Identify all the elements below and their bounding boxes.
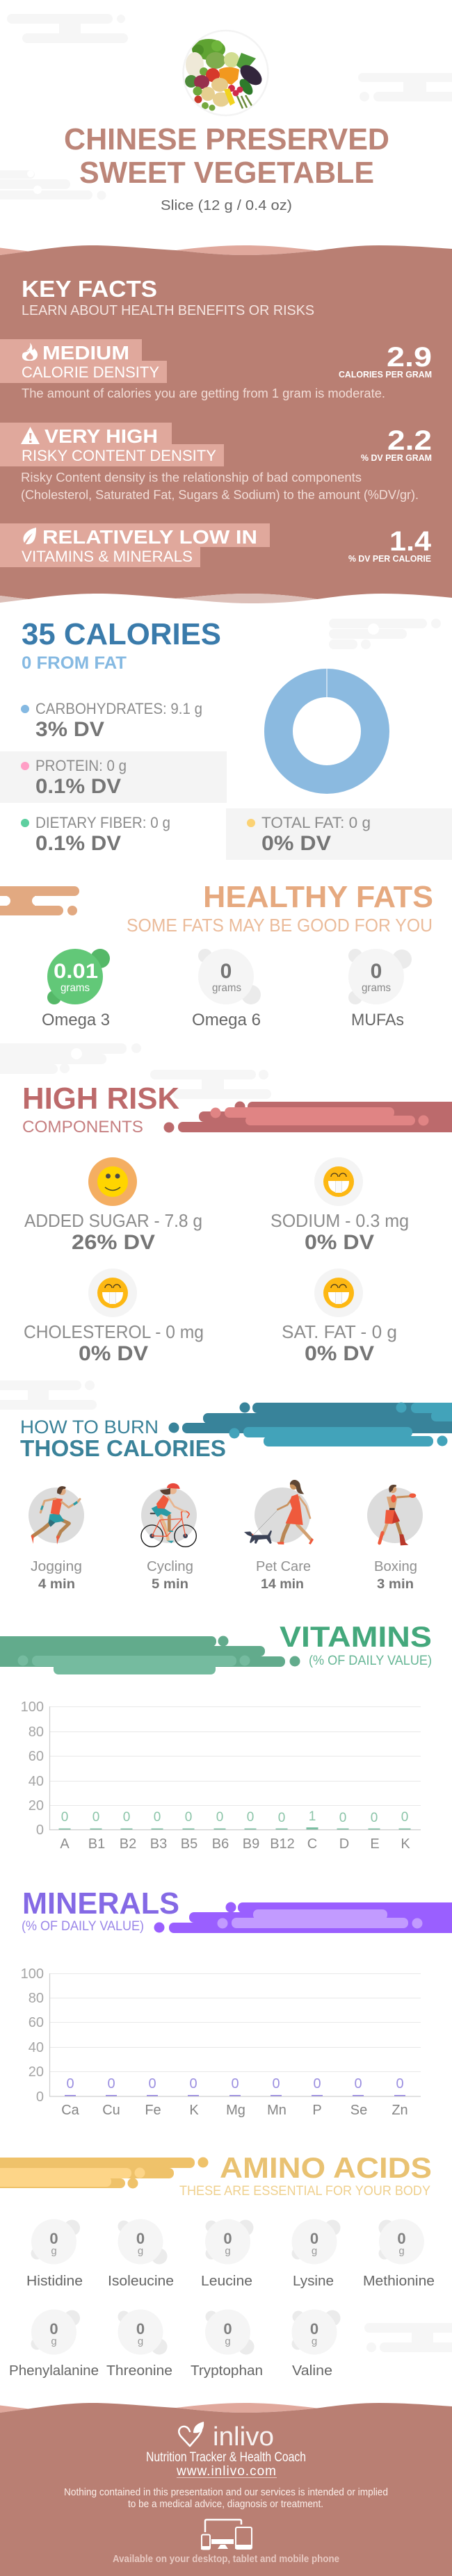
disclaimer: Nothing contained in this presentation and our services is intended or implied bbox=[64, 2486, 388, 2498]
amino: histidine bbox=[26, 2219, 83, 2289]
subheading: COMPONENTS bbox=[22, 1118, 143, 1136]
fat: omega 3: Omega 3 bbox=[42, 1011, 110, 1029]
bar chart: minerals: 0 bbox=[36, 2089, 44, 2105]
heading: key facts: KEY FACTS bbox=[22, 276, 157, 302]
amino: leucine: 0 bbox=[223, 2230, 232, 2247]
bar chart: vitamins: 0 bbox=[216, 1810, 223, 1825]
labels: activities: 14 min bbox=[261, 1577, 304, 1592]
amino: leucine bbox=[201, 2219, 253, 2289]
title: SWEET VEGETABLE bbox=[79, 156, 374, 190]
amino: valine: g bbox=[312, 2335, 317, 2347]
amino: methionine: 0 bbox=[397, 2230, 406, 2247]
amino: lysine bbox=[292, 2219, 341, 2289]
component: cholesterol: CHOLESTEROL - 0 mg bbox=[24, 1321, 204, 1342]
bar chart: minerals: 40 bbox=[29, 2040, 44, 2055]
metric: dv per calorie bbox=[348, 526, 432, 564]
labels: activities: Boxing bbox=[374, 1559, 417, 1574]
subheading: (% OF DAILY VALUE) bbox=[309, 1654, 432, 1668]
heading: healthy fats: HEALTHY FATS bbox=[203, 880, 433, 914]
amino: phenylalanine: Phenylalanine bbox=[9, 2363, 99, 2379]
calorie density description: The amount of calories you are getting from 1 gram is moderate. bbox=[22, 386, 385, 400]
calorie density label bbox=[0, 339, 167, 383]
risky content description bbox=[21, 471, 419, 502]
amino: threonine: g bbox=[138, 2335, 143, 2347]
heading: high risk: HIGH RISK bbox=[22, 1082, 179, 1116]
legend: dietary fiber: 0.1% DV bbox=[35, 832, 121, 855]
bar chart: vitamins: B6 bbox=[212, 1836, 229, 1852]
risky content description: Risky Content density is the relationship of bad components bbox=[21, 471, 362, 484]
component: saturated fat: SAT. FAT - 0 g bbox=[282, 1321, 397, 1342]
amino: histidine: g bbox=[51, 2245, 57, 2257]
bar chart: vitamins: 0 bbox=[371, 1811, 378, 1825]
panel: key facts bbox=[0, 245, 452, 603]
icon: flame bbox=[22, 343, 38, 361]
subheading: LEARN ABOUT HEALTH BENEFITS OR RISKS bbox=[22, 303, 314, 318]
subheading: (% OF DAILY VALUE) bbox=[22, 1919, 144, 1934]
bar chart: vitamins: B12 bbox=[270, 1836, 295, 1852]
bar chart: vitamins: 0 bbox=[61, 1810, 68, 1825]
website link: www.inlivo.com bbox=[176, 2464, 276, 2479]
labels: activities bbox=[31, 1559, 417, 1592]
serving size: Slice (12 g / 0.4 oz) bbox=[161, 198, 292, 213]
bar chart: vitamins: 80 bbox=[29, 1725, 44, 1740]
bar chart: minerals: 0 bbox=[148, 2076, 156, 2092]
component: added sugar: 26% DV bbox=[72, 1231, 155, 1254]
metric: dv per gram bbox=[361, 425, 432, 463]
bar chart: vitamins: B2 bbox=[120, 1836, 136, 1852]
amino: phenylalanine bbox=[9, 2309, 99, 2379]
component: sodium: SODIUM - 0.3 mg bbox=[271, 1210, 409, 1231]
amino: tryptophan: 0 bbox=[223, 2320, 232, 2338]
subheading: from fat: 0 FROM FAT bbox=[22, 653, 127, 673]
bar chart: vitamins: 0 bbox=[278, 1811, 285, 1825]
metric: dv per gram: 2.2 bbox=[387, 425, 432, 456]
legend: protein: PROTEIN: 0 g bbox=[35, 757, 127, 774]
amino: threonine: 0 bbox=[136, 2320, 145, 2338]
bar chart: vitamins: 40 bbox=[29, 1774, 44, 1789]
labels: activities: 3 min bbox=[377, 1577, 414, 1592]
bar chart: vitamins: 0 bbox=[339, 1811, 346, 1825]
amino: methionine bbox=[363, 2219, 435, 2289]
legend: protein: 0.1% DV bbox=[35, 775, 121, 798]
icon: leaf bbox=[24, 528, 36, 544]
bar chart: vitamins: 0 bbox=[401, 1810, 408, 1825]
amino: isoleucine bbox=[108, 2219, 174, 2289]
bar chart: minerals: 20 bbox=[29, 2064, 44, 2080]
heading: amino acids: AMINO ACIDS bbox=[220, 2151, 432, 2184]
labels: activities: 4 min bbox=[38, 1577, 75, 1592]
bar chart: minerals: Mn bbox=[267, 2103, 286, 2118]
bar chart: minerals: Mg bbox=[226, 2103, 245, 2118]
component: cholesterol bbox=[24, 1269, 204, 1365]
food photo: vegetables bbox=[184, 31, 268, 115]
bar chart: minerals: Fe bbox=[145, 2103, 161, 2118]
metric: calories per gram: CALORIES PER GRAM bbox=[339, 369, 432, 380]
metric: calories per gram: 2.9 bbox=[387, 342, 432, 373]
legend: total fat bbox=[226, 808, 452, 860]
amino: tryptophan: Tryptophan bbox=[191, 2363, 263, 2379]
bar chart: vitamins: K bbox=[401, 1836, 410, 1852]
amino: histidine: 0 bbox=[49, 2230, 58, 2247]
amino: methionine: Methionine bbox=[363, 2274, 435, 2289]
bar chart: minerals: 100 bbox=[21, 1966, 44, 1982]
labels: activities: Cycling bbox=[147, 1559, 193, 1574]
amino: leucine: Leucine bbox=[201, 2274, 252, 2289]
bar chart: minerals: Se bbox=[350, 2103, 367, 2118]
heading: vitamins: VITAMINS bbox=[280, 1620, 432, 1653]
donut chart bbox=[278, 669, 376, 780]
heading: how to burn: HOW TO BURN bbox=[20, 1417, 159, 1437]
heading: minerals: MINERALS bbox=[22, 1886, 179, 1921]
bar chart: minerals: Zn bbox=[392, 2103, 408, 2118]
fat: omega 6: 0 bbox=[220, 960, 232, 983]
bar chart: minerals: 80 bbox=[29, 1991, 44, 2006]
amino: valine: Valine bbox=[292, 2363, 332, 2379]
component: cholesterol: 0% DV bbox=[79, 1342, 148, 1365]
metric: dv per calorie: % DV PER CALORIE bbox=[348, 553, 431, 564]
amino: threonine: Threonine bbox=[106, 2363, 172, 2379]
labels: activities: 5 min bbox=[152, 1577, 188, 1592]
bar chart: vitamins: E bbox=[370, 1836, 380, 1852]
amino: tryptophan bbox=[191, 2309, 263, 2379]
bar chart: vitamins: C bbox=[307, 1836, 317, 1852]
bar chart: vitamins: 0 bbox=[185, 1810, 192, 1825]
bar chart: minerals: 0 bbox=[189, 2076, 197, 2092]
bar chart: vitamins: 0 bbox=[123, 1810, 130, 1825]
bar chart: minerals: 60 bbox=[29, 2015, 44, 2030]
component: added sugar bbox=[24, 1157, 202, 1254]
metric: dv per calorie: 1.4 bbox=[389, 526, 432, 557]
fat: omega 3: grams bbox=[60, 982, 90, 994]
vitamins and minerals label bbox=[0, 523, 270, 567]
legend: dietary fiber bbox=[21, 814, 170, 855]
panel: healthy fats bbox=[0, 880, 433, 1029]
fat: omega 6 bbox=[192, 949, 261, 1029]
disclaimer bbox=[64, 2486, 388, 2510]
panel: high risk components bbox=[22, 1082, 452, 1365]
fat: mufas bbox=[348, 949, 412, 1029]
labels: activities: Jogging bbox=[31, 1559, 82, 1574]
legend: total fat: 0% DV bbox=[261, 832, 331, 855]
bar chart: vitamins: A bbox=[60, 1836, 70, 1852]
activity: cycling bbox=[141, 1483, 197, 1547]
amino: histidine: Histidine bbox=[26, 2274, 83, 2289]
amino: lysine: Lysine bbox=[293, 2274, 334, 2289]
amino: leucine: g bbox=[225, 2245, 231, 2257]
bar chart: minerals: 0 bbox=[313, 2076, 321, 2092]
availability note: Available on your desktop, tablet and mobile phone bbox=[113, 2553, 339, 2565]
amino: methionine: g bbox=[398, 2245, 405, 2257]
title: CHINESE PRESERVED bbox=[64, 122, 389, 156]
component: sodium bbox=[271, 1157, 409, 1254]
bar chart: minerals: Ca bbox=[61, 2103, 80, 2118]
panel: how to burn bbox=[20, 1403, 452, 1592]
risky content density label bbox=[0, 423, 224, 466]
component: added sugar: ADDED SUGAR - 7.8 g bbox=[24, 1210, 202, 1231]
amino: valine: 0 bbox=[310, 2320, 318, 2338]
legend: protein bbox=[0, 751, 227, 803]
icon: devices bbox=[201, 2520, 252, 2550]
risky content description: (Cholesterol, Saturated Fat, Sugars & Sodium) to the amount (%DV/gr). bbox=[21, 488, 419, 502]
heading: 35 calories: 35 CALORIES bbox=[22, 617, 221, 651]
activity: boxing bbox=[367, 1485, 423, 1545]
bar chart: vitamins: 100 bbox=[21, 1699, 44, 1715]
bar chart: vitamins: 60 bbox=[29, 1749, 44, 1764]
fat: omega 3: 0.01 bbox=[54, 960, 98, 983]
title bbox=[64, 122, 389, 190]
bar chart: minerals: Cu bbox=[102, 2103, 120, 2118]
metric: dv per gram: % DV PER GRAM bbox=[361, 453, 432, 463]
activity: pet care bbox=[244, 1480, 314, 1544]
bar chart: minerals: P bbox=[312, 2103, 322, 2118]
bar chart: minerals bbox=[21, 1966, 421, 2118]
amino: phenylalanine: 0 bbox=[49, 2320, 58, 2338]
amino: isoleucine: g bbox=[138, 2245, 143, 2257]
vitamins and minerals label: RELATIVELY LOW IN bbox=[42, 526, 257, 548]
bar chart: vitamins: 0 bbox=[92, 1810, 99, 1825]
bar chart: vitamins bbox=[21, 1699, 421, 1852]
bar chart: vitamins: B9 bbox=[243, 1836, 259, 1852]
calorie density label: MEDIUM bbox=[42, 342, 129, 364]
calorie density label: CALORIE DENSITY bbox=[22, 364, 159, 381]
tagline: Nutrition Tracker & Health Coach bbox=[146, 2450, 306, 2465]
panel: calories bbox=[0, 617, 452, 860]
bar chart: minerals: K bbox=[189, 2103, 199, 2118]
bar chart: minerals: 0 bbox=[107, 2076, 115, 2092]
heading: those calories: THOSE CALORIES bbox=[20, 1435, 226, 1461]
vitamins and minerals label: VITAMINS & MINERALS bbox=[22, 548, 193, 565]
bar chart: minerals: 0 bbox=[396, 2076, 404, 2092]
amino: tryptophan: g bbox=[225, 2335, 231, 2347]
bar chart: vitamins: D bbox=[339, 1836, 349, 1852]
bar chart: vitamins: 1 bbox=[309, 1809, 316, 1824]
bar chart: vitamins: B3 bbox=[150, 1836, 167, 1852]
legend: dietary fiber: DIETARY FIBER: 0 g bbox=[35, 814, 170, 831]
panel: footer bbox=[0, 2403, 452, 2576]
legend: carbohydrates bbox=[21, 700, 202, 741]
component: saturated fat: 0% DV bbox=[305, 1342, 374, 1365]
panel: minerals bbox=[21, 1886, 452, 2118]
fat: omega 3 bbox=[42, 949, 110, 1029]
bar chart: minerals: 0 bbox=[272, 2076, 280, 2092]
amino: isoleucine: Isoleucine bbox=[108, 2274, 174, 2289]
bar chart: vitamins: 0 bbox=[247, 1810, 254, 1825]
amino: threonine bbox=[106, 2309, 172, 2379]
fat: omega 6: grams bbox=[212, 982, 241, 994]
amino: lysine: 0 bbox=[310, 2230, 318, 2247]
subheading: THESE ARE ESSENTIAL FOR YOUR BODY bbox=[179, 2184, 430, 2199]
legend: carbohydrates: 3% DV bbox=[35, 718, 104, 741]
metric: calories per gram bbox=[339, 342, 432, 380]
labels: activities: Pet Care bbox=[256, 1559, 311, 1574]
logo: inlivo: inlivo bbox=[213, 2422, 274, 2452]
component: saturated fat bbox=[282, 1269, 397, 1365]
bar chart: vitamins: 20 bbox=[29, 1798, 44, 1813]
subheading: SOME FATS MAY BE GOOD FOR YOU bbox=[127, 915, 433, 936]
bar chart: minerals: 0 bbox=[231, 2076, 239, 2092]
bar chart: vitamins: B1 bbox=[88, 1836, 105, 1852]
panel: vitamins bbox=[0, 1620, 432, 1852]
amino: phenylalanine: g bbox=[51, 2335, 57, 2347]
fat: omega 6: Omega 6 bbox=[192, 1011, 261, 1029]
panel: amino acids bbox=[0, 2151, 435, 2379]
component: sodium: 0% DV bbox=[305, 1231, 374, 1254]
bar chart: minerals: 0 bbox=[66, 2076, 74, 2092]
amino: lysine: g bbox=[312, 2245, 317, 2257]
bar chart: minerals: 0 bbox=[354, 2076, 362, 2092]
disclaimer: to be a medical advice, diagnosis or treatment. bbox=[128, 2498, 323, 2510]
bar chart: vitamins: B5 bbox=[181, 1836, 197, 1852]
bar chart: vitamins: 0 bbox=[36, 1823, 44, 1838]
fat: mufas: 0 bbox=[371, 960, 382, 983]
fat: mufas: MUFAs bbox=[351, 1011, 404, 1029]
risky content density label: VERY HIGH bbox=[45, 425, 158, 447]
risky content density label: RISKY CONTENT DENSITY bbox=[22, 447, 216, 464]
activity: jogging bbox=[29, 1486, 84, 1544]
logo: inlivo bbox=[179, 2422, 274, 2452]
fat: mufas: grams bbox=[362, 982, 391, 994]
amino: valine bbox=[292, 2309, 341, 2379]
icon: warning bbox=[21, 427, 40, 444]
legend: total fat: TOTAL FAT: 0 g bbox=[261, 814, 371, 831]
legend: carbohydrates: CARBOHYDRATES: 9.1 g bbox=[35, 700, 202, 717]
amino: isoleucine: 0 bbox=[136, 2230, 145, 2247]
bar chart: vitamins: 0 bbox=[154, 1810, 161, 1825]
